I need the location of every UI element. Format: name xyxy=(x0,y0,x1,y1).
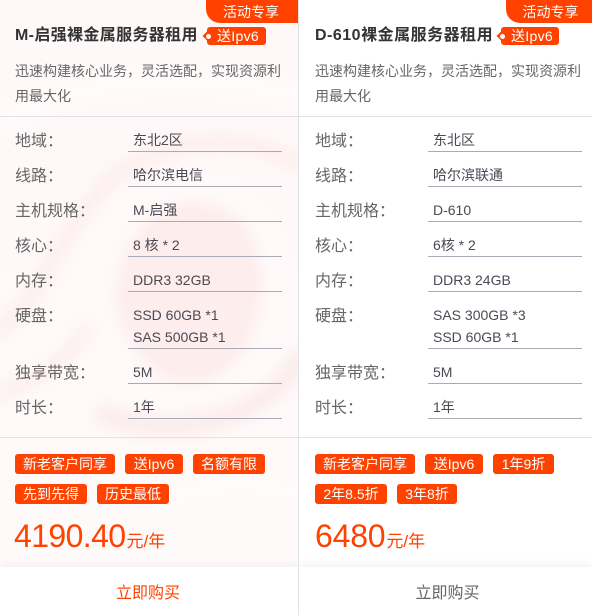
spec rows: 1年 xyxy=(133,399,155,415)
promo tags: 送Ipv6 xyxy=(134,456,174,472)
spec rows: 哈尔滨电信 xyxy=(133,167,203,183)
promo tags: 送Ipv6 xyxy=(434,456,474,472)
spec rows: SSD 60GB *1 xyxy=(133,307,219,323)
spec: 独享带宽 xyxy=(315,364,582,384)
spec rows: 独享带宽： xyxy=(315,365,395,382)
spec: 内存 xyxy=(315,272,582,292)
spec rows: 独享带宽： xyxy=(15,365,95,382)
spec: 地域 xyxy=(15,132,282,152)
ribbon: 活动专享 xyxy=(506,0,592,23)
spec: 独享带宽 xyxy=(15,364,282,384)
spec rows: SAS 300GB *3 xyxy=(433,307,526,323)
spec rows: 5M xyxy=(133,364,152,380)
panel: M-启强 server card xyxy=(0,0,298,615)
ribbon: 活动专享 xyxy=(206,0,298,23)
spec rows: 内存： xyxy=(315,273,363,290)
promo tags: 3年8折 xyxy=(405,486,449,502)
panel divider xyxy=(298,0,299,615)
description: 迅速构建核心业务，灵活选配，实现资源利用最大化 xyxy=(315,63,581,104)
spec rows: 主机规格： xyxy=(315,203,395,220)
spec rows: 1年 xyxy=(433,399,455,415)
promo tags xyxy=(315,454,554,504)
spec: 硬盘 xyxy=(15,307,282,349)
promo tags: 先到先得 xyxy=(23,486,79,502)
panel: D-610 server card xyxy=(299,0,592,615)
heading: D-610裸金属服务器租用 xyxy=(315,27,493,44)
spec rows: 地域： xyxy=(315,133,363,150)
buy button: 立即购买 xyxy=(415,585,480,602)
spec rows: M-启强 xyxy=(133,202,177,218)
buy button xyxy=(0,567,298,615)
promo tags: 新老客户同享 xyxy=(23,456,107,472)
ribbon: 活动专享: 活动专享 xyxy=(522,4,578,20)
spec rows: 5M xyxy=(433,364,452,380)
description: 迅速构建核心业务，灵活选配，实现资源利用最大化 xyxy=(15,63,281,104)
spec: 主机规格 xyxy=(315,202,582,222)
spec rows: 东北区 xyxy=(433,132,475,148)
spec: 核心 xyxy=(15,237,282,257)
decorative swirl background xyxy=(103,208,298,432)
spec rows xyxy=(15,132,282,419)
spec rows: 东北2区 xyxy=(133,132,183,148)
spec rows xyxy=(315,132,582,419)
spec: 时长 xyxy=(15,399,282,419)
spec rows: 线路： xyxy=(15,168,63,185)
spec rows: 硬盘： xyxy=(315,308,363,325)
spec: 线路 xyxy=(315,167,582,187)
spec rows: 6核 * 2 xyxy=(433,237,476,253)
promo tags: 2年8.5折 xyxy=(323,486,379,502)
promo tags: 1年9折 xyxy=(502,456,545,472)
spec: 核心 xyxy=(315,237,582,257)
spec rows: 核心： xyxy=(15,238,63,255)
badge: 送Ipv6 xyxy=(501,27,559,45)
spec: 主机规格 xyxy=(15,202,282,222)
spec rows: 核心： xyxy=(315,238,363,255)
spec rows: SAS 500GB *1 xyxy=(133,329,226,345)
spec rows: DDR3 32GB xyxy=(133,272,211,288)
price: 4190.40元/年 xyxy=(14,518,165,554)
spec: 内存 xyxy=(15,272,282,292)
spec rows: 主机规格： xyxy=(15,203,95,220)
ribbon: 活动专享: 活动专享 xyxy=(223,4,279,20)
badge: 送Ipv6: 送Ipv6 xyxy=(217,28,259,44)
buy button: 立即购买 xyxy=(116,585,180,602)
spec rows: D-610 xyxy=(433,202,471,218)
spec rows: 地域： xyxy=(15,133,63,150)
spec rows: DDR3 24GB xyxy=(433,272,511,288)
spec rows: 内存： xyxy=(15,273,63,290)
spec rows: 8 核 * 2 xyxy=(133,237,180,253)
spec rows: 哈尔滨联通 xyxy=(433,167,503,183)
spec: 时长 xyxy=(315,399,582,419)
spec rows: 时长： xyxy=(15,400,63,417)
spec: 地域 xyxy=(315,132,582,152)
spec rows: 时长： xyxy=(315,400,363,417)
spec rows: SSD 60GB *1 xyxy=(433,329,519,345)
promo tags: 名额有限 xyxy=(201,456,257,472)
spec rows: 硬盘： xyxy=(15,308,63,325)
price: 6480元/年 xyxy=(315,518,425,554)
buy button xyxy=(299,567,592,615)
badge: 送Ipv6 xyxy=(207,27,266,45)
badge: 送Ipv6: 送Ipv6 xyxy=(511,28,553,44)
heading: M-启强裸金属服务器租用 xyxy=(15,27,198,44)
spec rows: 线路： xyxy=(315,168,363,185)
promo tags: 历史最低 xyxy=(105,486,161,502)
promo tags xyxy=(15,454,265,504)
spec: 线路 xyxy=(15,167,282,187)
promo tags: 新老客户同享 xyxy=(323,456,407,472)
spec: 硬盘 xyxy=(315,307,582,349)
